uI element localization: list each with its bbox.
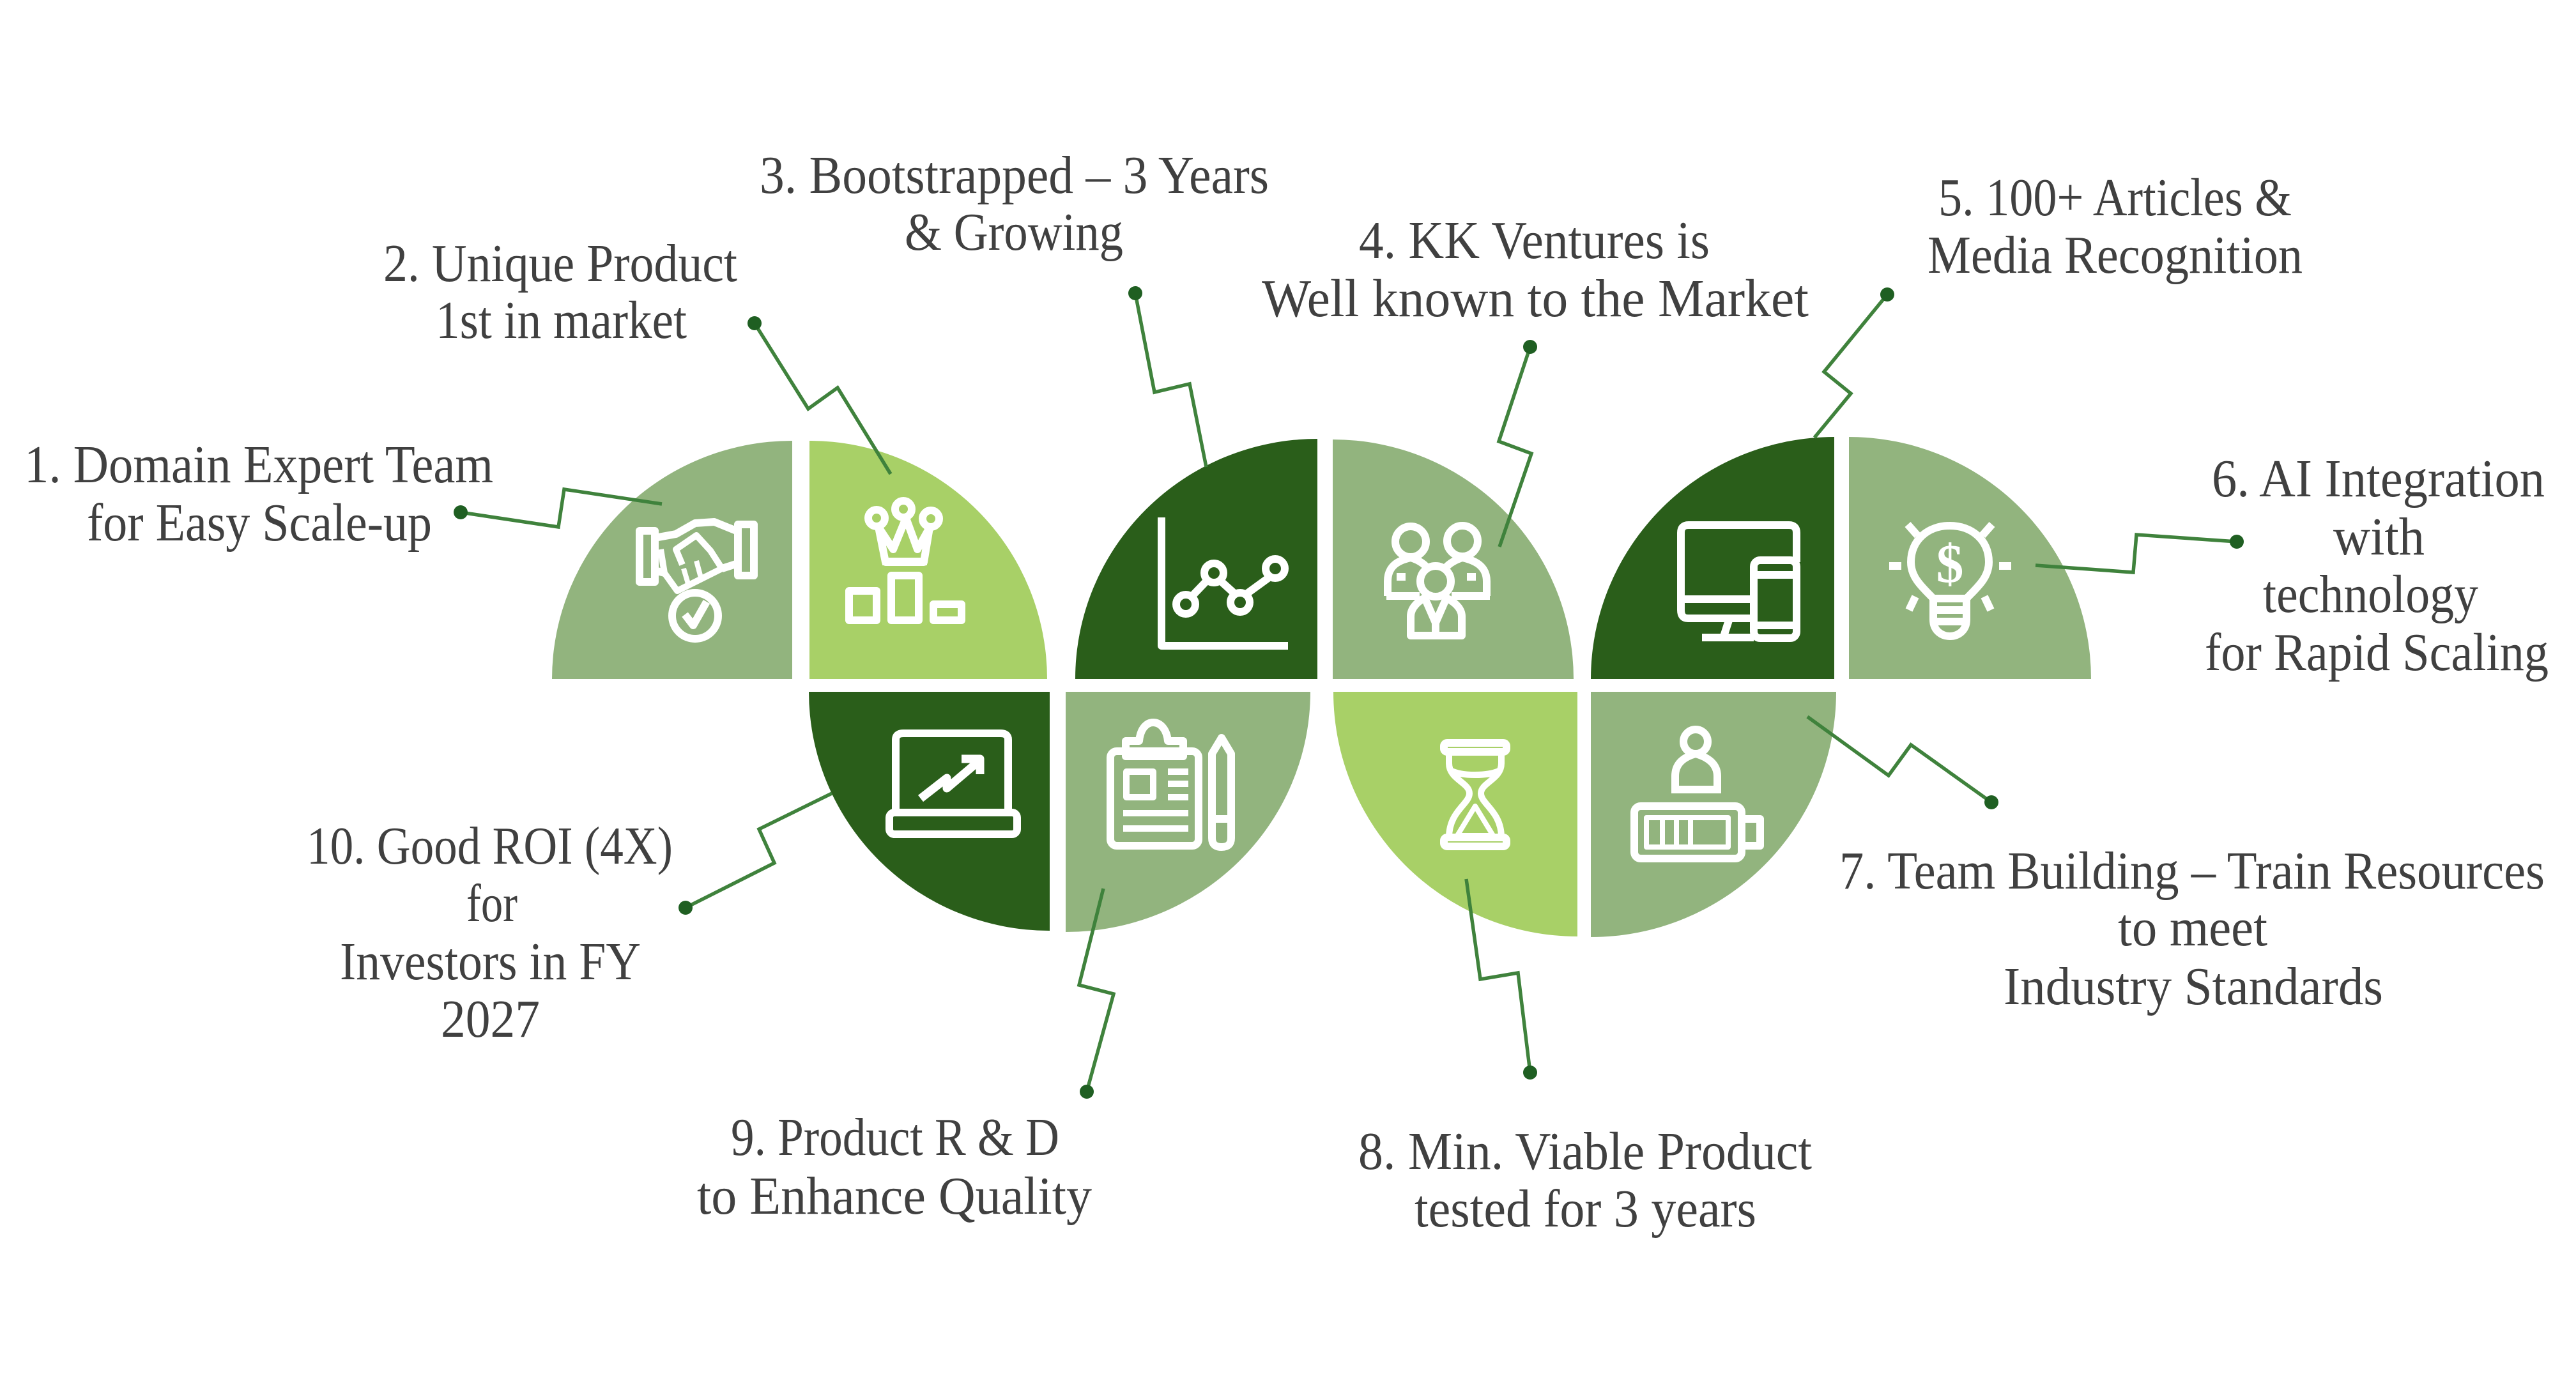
label 10: 10. Good ROI (4X) — [307, 816, 673, 876]
label 8 — [1358, 1122, 1812, 1239]
label 7 — [1839, 841, 2545, 1016]
segment 6 — [1849, 437, 2091, 679]
item 5: media recognition — [1591, 168, 2303, 679]
label 4: Well known to the Market — [1262, 269, 1809, 328]
icon: hourglass — [1444, 743, 1506, 846]
leader line 8 — [1466, 879, 1537, 1080]
label 6: technology — [2263, 565, 2478, 624]
segment 10 — [809, 692, 1050, 931]
icon: monitor and phone — [1681, 525, 1797, 638]
label 4 — [1262, 211, 1809, 328]
segment 5 — [1591, 437, 1834, 679]
leader line 1 — [454, 489, 662, 527]
label 1: for Easy Scale-up — [87, 493, 432, 553]
icon: laptop with rising arrow — [889, 733, 1017, 834]
label 5 — [1928, 168, 2303, 285]
label 10: for — [466, 874, 518, 933]
label 10: 2027 — [441, 989, 540, 1049]
leader line 3 — [1128, 286, 1206, 467]
item 1: domain expert team — [24, 435, 792, 679]
leader line 5 — [1814, 287, 1894, 438]
leader line 7 — [1807, 717, 1998, 809]
item 4: KK Ventures — [1262, 211, 1809, 679]
leader line 10 — [678, 793, 832, 915]
label 1 — [24, 435, 493, 553]
segment 7 — [1591, 692, 1836, 937]
label 4: 4. KK Ventures is — [1359, 211, 1710, 270]
icon: line chart — [1162, 517, 1288, 646]
label 7: to meet — [2118, 898, 2267, 958]
item 7: team building — [1591, 692, 2545, 1016]
leader line 9 — [1079, 889, 1114, 1099]
icon: light bulb with dollar — [1889, 524, 2011, 636]
label 8: 8. Min. Viable Product — [1358, 1122, 1812, 1181]
label 9: to Enhance Quality — [697, 1166, 1092, 1226]
label 1: 1. Domain Expert Team — [24, 435, 493, 494]
label 5: 5. 100+ Articles & — [1938, 168, 2292, 227]
label 10: Investors in FY — [340, 932, 641, 991]
item 6: AI integration — [1849, 437, 2549, 682]
label 2: 1st in market — [436, 291, 687, 350]
segment 4 — [1333, 439, 1574, 679]
icon: clipboard and pencil — [1110, 722, 1231, 847]
label 8: tested for 3 years — [1414, 1179, 1756, 1239]
icon: group of people — [1386, 526, 1490, 636]
label 9: 9. Product R & D — [731, 1108, 1059, 1167]
leader line 4 — [1499, 340, 1537, 547]
label 5: Media Recognition — [1928, 225, 2303, 285]
dollar sign: $ — [1936, 533, 1964, 594]
leader line 6 — [2035, 535, 2244, 572]
icon: handshake with check badge — [640, 522, 754, 639]
icon: crown and podium — [849, 501, 962, 620]
label 7: Industry Standards — [2004, 957, 2383, 1016]
segment 9 — [1066, 692, 1310, 932]
label 2 — [383, 234, 737, 350]
segment 8 — [1333, 692, 1577, 936]
segment 3 — [1075, 439, 1317, 679]
label 6: 6. AI Integration — [2212, 449, 2545, 508]
label 3 — [760, 146, 1269, 262]
item 8: minimum viable product — [1333, 692, 1812, 1239]
segment 1 — [552, 441, 792, 679]
segment 2 — [809, 441, 1047, 679]
icon: person above battery — [1634, 729, 1760, 859]
label 6: with — [2333, 507, 2425, 567]
label 10 — [307, 816, 673, 1049]
item 2: unique product — [383, 234, 1047, 679]
item 9: product R and D — [697, 692, 1310, 1226]
leader line 2 — [747, 316, 891, 474]
label 6 — [2205, 449, 2549, 682]
label 2: 2. Unique Product — [383, 234, 737, 293]
item 3: bootstrapped — [760, 146, 1317, 679]
item 10: good ROI — [307, 692, 1050, 1049]
label 3: 3. Bootstrapped – 3 Years — [760, 146, 1269, 205]
label 9 — [697, 1108, 1092, 1226]
label 3: & Growing — [905, 202, 1123, 262]
label 6: for Rapid Scaling — [2205, 623, 2549, 682]
